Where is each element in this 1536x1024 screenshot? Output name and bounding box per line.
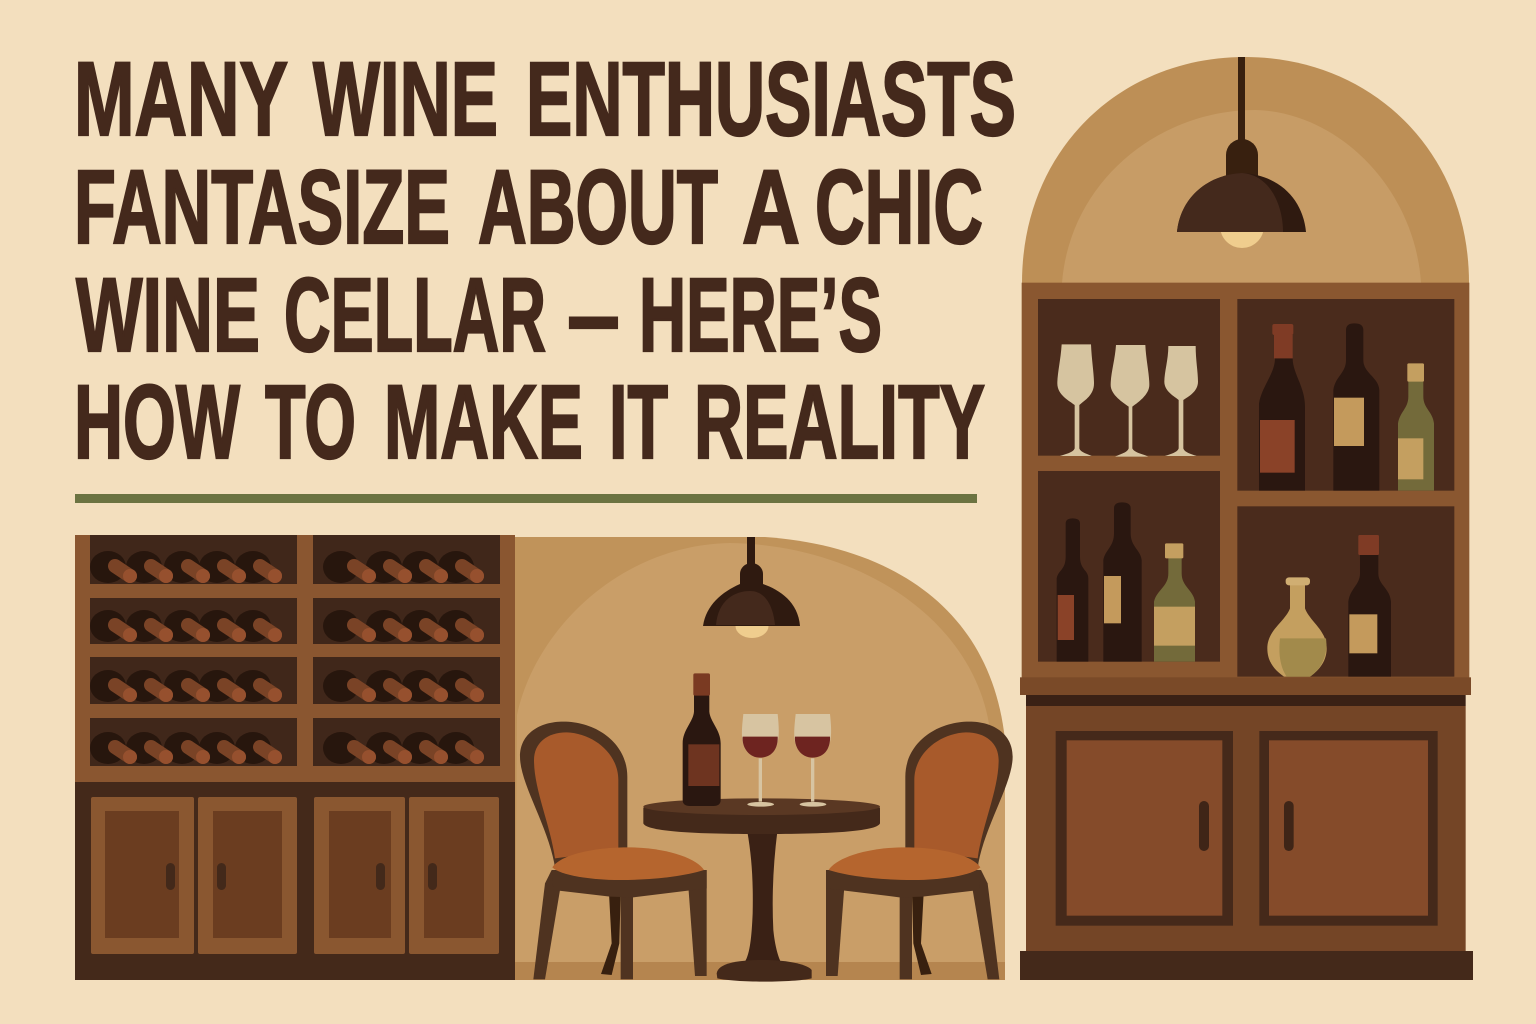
- three empty wine glasses: [1057, 344, 1198, 457]
- table: [643, 798, 880, 982]
- tall tan-label bottle: [1103, 502, 1142, 662]
- right chair: [826, 722, 1013, 979]
- icon: alcove pendant lamp: [703, 537, 800, 638]
- title: ABOUT: [478, 149, 718, 266]
- title: A: [742, 149, 800, 266]
- icon: arch pendant lamp: [1177, 57, 1306, 248]
- title: [74, 41, 1016, 481]
- left chair: [520, 722, 707, 979]
- title: MANY: [74, 41, 288, 158]
- title: HOW: [74, 364, 240, 481]
- green divider rule: [75, 494, 977, 503]
- olive wide-label bottle: [1154, 543, 1195, 662]
- panel: arch alcove: [1022, 57, 1469, 283]
- olive bottle: [1398, 363, 1434, 491]
- panel: wine rack: [75, 535, 515, 782]
- title: WINE: [76, 257, 260, 374]
- title: CHIC: [815, 149, 983, 266]
- panel: alcove wall: [515, 537, 1005, 980]
- title: TO: [265, 364, 356, 481]
- title: WINE: [313, 41, 498, 158]
- panel: upper shelving: [1022, 283, 1469, 678]
- rack bottles row 1: [90, 551, 484, 583]
- wine glasses on table: [742, 714, 831, 807]
- small red-label bottle: [1057, 518, 1088, 662]
- left door: [1056, 731, 1233, 926]
- tan-label dark bottle: [1333, 323, 1379, 491]
- title: CELLAR: [284, 257, 546, 374]
- red-label dark bottle: [1259, 324, 1305, 491]
- panel: lower left cabinet: [75, 782, 515, 980]
- title: IT: [609, 364, 668, 481]
- panel: lower right cabinet: [1020, 677, 1473, 980]
- red-corked tan-label bottle: [1348, 535, 1391, 677]
- rack bottles row 3: [90, 670, 484, 702]
- title: REALITY: [694, 364, 985, 481]
- title: ENTHUSIASTS: [526, 41, 1016, 158]
- title: FANTASIZE: [74, 149, 450, 266]
- title: –: [567, 257, 620, 374]
- wine bottle on table: [683, 673, 721, 806]
- rack bottles row 2: [90, 610, 484, 642]
- right door: [1259, 731, 1438, 926]
- rack bottles row 4: [90, 732, 484, 764]
- decanter: [1267, 577, 1327, 677]
- title: HERE’S: [639, 257, 882, 374]
- title: MAKE: [384, 364, 583, 481]
